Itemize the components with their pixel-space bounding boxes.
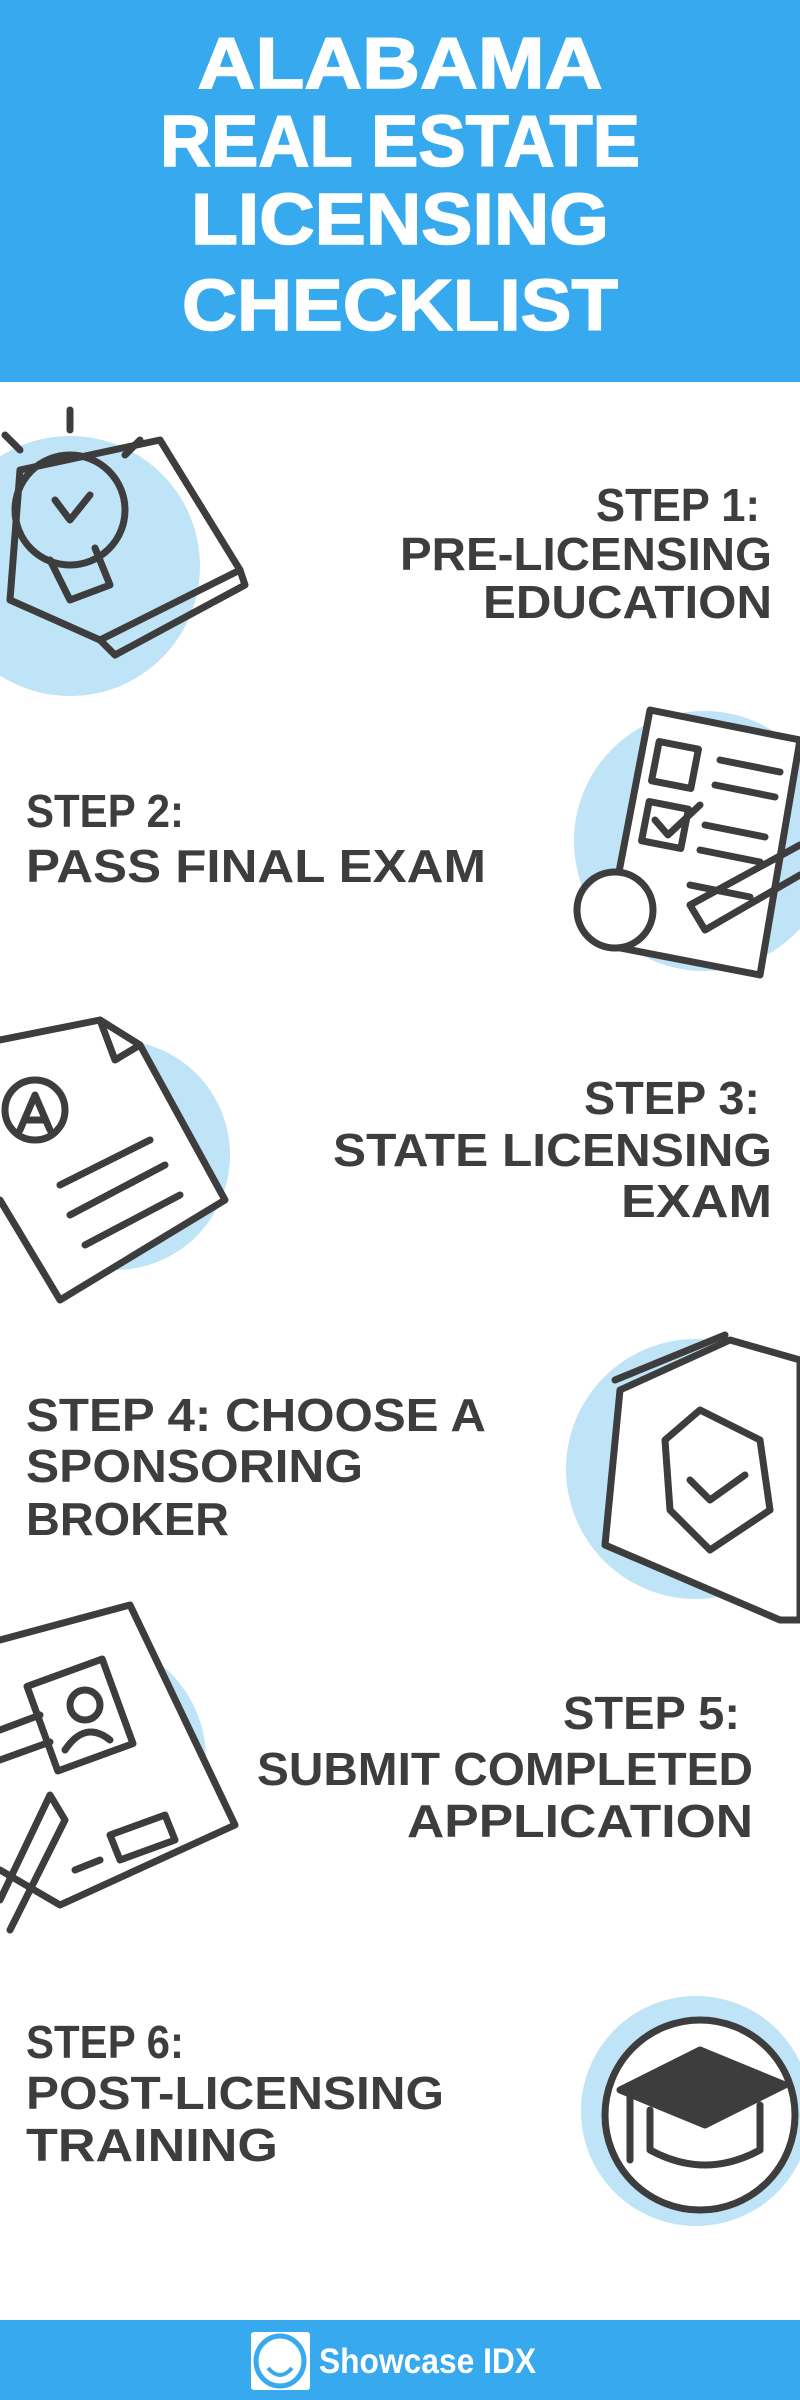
step 6 text: STEP 6:	[26, 2016, 184, 2068]
header	[0, 0, 800, 382]
step 2 text	[26, 785, 486, 892]
step 2 text: PASS FINAL EXAM	[26, 840, 486, 892]
step 5 text: APPLICATION	[407, 1795, 753, 1847]
logo icon	[251, 2332, 310, 2390]
icon: graded paper	[0, 1020, 230, 1300]
step 4 text: STEP 4: CHOOSE A	[26, 1389, 486, 1441]
step 2 text: STEP 2:	[26, 785, 184, 837]
step 4 text: SPONSORING	[26, 1440, 363, 1492]
step 5	[0, 1605, 753, 1930]
logo text: Showcase IDX	[319, 2342, 537, 2381]
icon: shield sign	[566, 1335, 800, 1620]
step 3 text: EXAM	[621, 1175, 772, 1227]
step 6 text	[26, 2016, 444, 2171]
step 3	[0, 1020, 772, 1300]
footer	[0, 2320, 800, 2400]
step 6 text: POST-LICENSING	[26, 2067, 444, 2119]
title: REAL ESTATE	[160, 102, 640, 182]
icon: exam paper	[574, 710, 800, 975]
step 1 text: EDUCATION	[483, 576, 772, 628]
step 1	[0, 410, 772, 696]
step 2	[26, 710, 800, 975]
step 4 text: BROKER	[26, 1493, 229, 1545]
step 5 text: STEP 5:	[563, 1687, 740, 1739]
step 5 text: SUBMIT COMPLETED	[257, 1743, 753, 1795]
icon: lightbulb book	[0, 410, 245, 696]
title: CHECKLIST	[182, 266, 618, 346]
step 6	[26, 1996, 800, 2226]
step 3 text	[333, 1072, 772, 1227]
title: LICENSING	[191, 180, 609, 260]
step 1 text	[400, 479, 772, 628]
icon: graduation cap	[581, 1996, 800, 2226]
step 1 text: PRE-LICENSING	[400, 528, 772, 580]
title	[160, 24, 640, 346]
step 5 text	[257, 1687, 753, 1847]
step 1 text: STEP 1:	[596, 479, 760, 531]
step 4 text	[26, 1389, 486, 1545]
step 3 text: STEP 3:	[584, 1072, 760, 1124]
step 4	[26, 1335, 800, 1620]
icon: application form	[0, 1605, 235, 1930]
step 6 text: TRAINING	[26, 2119, 278, 2171]
step 3 text: STATE LICENSING	[333, 1124, 772, 1176]
title: ALABAMA	[198, 24, 602, 104]
